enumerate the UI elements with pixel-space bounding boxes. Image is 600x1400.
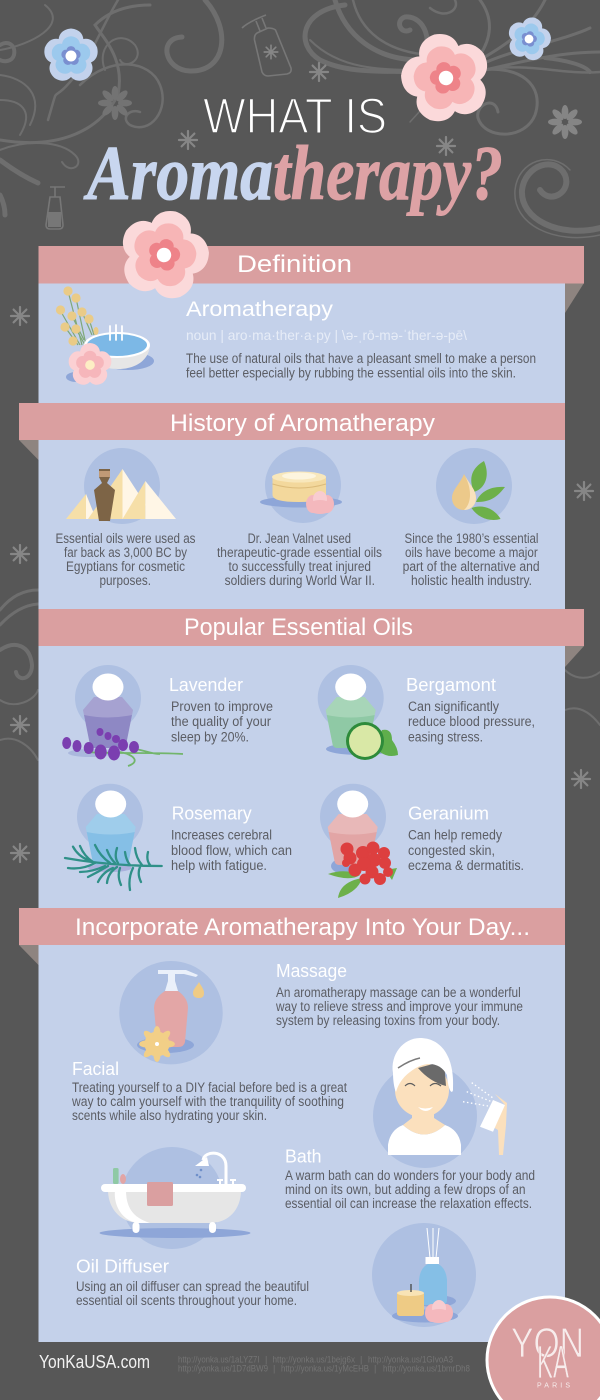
history text: egyptians: Egyptians for cosmetic — [66, 559, 185, 574]
banner: history of aromatherapy — [19, 403, 565, 460]
geranium text: eczema & dermatitis. — [408, 858, 524, 873]
massage text: way to relieve stress and improve your immune — [275, 999, 523, 1014]
icon: bergamot bottle — [318, 665, 398, 760]
footer source links: http://yonka.us/1GIvoA3 — [368, 1355, 453, 1365]
footer source links: | — [374, 1364, 376, 1374]
banner: popular essential oils — [38, 609, 584, 667]
definition text: feel better especially by rubbing the essential oils into the skin. — [186, 366, 516, 380]
logo: yon-ka paris: PARIS — [537, 1382, 570, 1390]
history text: dr valnet — [217, 531, 382, 588]
history text: 1980s — [403, 531, 540, 588]
title: aromatherapy — [84, 130, 503, 216]
footer source links: http://yonka.us/1D7dBW9 — [178, 1364, 268, 1374]
oil diffuser text — [76, 1257, 309, 1308]
history text: egyptians: far back as 3,000 BC by — [64, 545, 187, 560]
icon: bathtub — [100, 1147, 250, 1249]
title: aromatherapy: Aroma — [84, 130, 273, 216]
logo: yon-ka paris — [487, 1297, 600, 1400]
bergamot text — [406, 675, 535, 745]
footer source links: | — [273, 1364, 275, 1374]
history text: 1980s: Since the 1980’s essential — [404, 531, 538, 546]
geranium text — [408, 804, 524, 873]
banner: incorporate aromatherapy — [19, 908, 565, 965]
rosemary text: blood flow, which can — [171, 843, 292, 858]
facial text: Treating yourself to a DIY facial before bed is a great — [72, 1080, 347, 1095]
bergamot text: easing stress. — [408, 730, 483, 745]
footer source links: http://yonka.us/1yMcEHB — [281, 1364, 369, 1374]
banner: history of aromatherapy: History of Aromatherapy — [170, 410, 435, 437]
bergamot text: Can significantly — [408, 699, 499, 714]
definition text: The use of natural oils that have a pleasant smell to make a person — [186, 351, 536, 366]
icon: bowl with flowers — [56, 286, 154, 389]
history text: dr valnet: soldiers during World War II. — [225, 573, 375, 588]
history text: 1980s: oils have become a major — [405, 545, 538, 560]
history text: 1980s: holistic health industry. — [411, 573, 532, 588]
lavender text: the quality of your — [171, 714, 271, 729]
massage text — [275, 961, 523, 1028]
icon: pyramids and vase — [66, 448, 176, 524]
icon: oil drop and leaves — [436, 448, 512, 524]
icon: woman with facial mist — [373, 1038, 507, 1168]
footer source links: | — [360, 1355, 362, 1365]
geranium text: congested skin, — [408, 843, 495, 858]
facial text: scents while also hydrating your skin. — [72, 1108, 267, 1123]
flower: blue top left — [41, 28, 101, 86]
icon: rosemary bottle — [65, 784, 162, 890]
footer source links: http://yonka.us/1aLYZ7I — [178, 1355, 260, 1365]
lavender text: Proven to improve — [171, 699, 273, 714]
oil diffuser text: Oil Diffuser — [76, 1257, 169, 1277]
bath text: essential oil can increase the relaxation effects. — [285, 1196, 532, 1211]
history text: egyptians — [56, 531, 196, 588]
decorative small asterisks and daisies — [11, 63, 593, 862]
flower: blue top right — [500, 12, 558, 68]
icon: small bottle outline left — [46, 187, 65, 229]
logo: yon-ka paris: YON — [511, 1319, 584, 1366]
oil diffuser text: Using an oil diffuser can spread the beautiful — [76, 1279, 309, 1294]
massage text: system by releasing toxins from your body. — [276, 1013, 500, 1028]
icon: lavender bottle — [62, 665, 183, 766]
flower: pink on banner — [104, 199, 223, 314]
banner: definition — [38, 246, 584, 313]
oil diffuser text: essential oil scents throughout your home. — [76, 1293, 297, 1308]
rosemary text: help with fatigue. — [171, 858, 267, 873]
history text: dr valnet: to successfully treat injured — [228, 559, 371, 574]
lavender text: Lavender — [169, 675, 243, 695]
logo: yon-ka paris: KA — [537, 1336, 569, 1388]
massage text: Massage — [276, 961, 347, 981]
geranium text: Can help remedy — [408, 828, 502, 842]
massage text: An aromatherapy massage can be a wonderful — [276, 985, 521, 1000]
icon: massage pump bottle — [119, 961, 223, 1064]
facial text — [71, 1059, 347, 1123]
icon: cream jar and lotus — [260, 447, 342, 523]
geranium text: Geranium — [408, 804, 489, 824]
footer source links: http://yonka.us/1bejg6x — [272, 1355, 355, 1365]
bath text: Bath — [285, 1147, 322, 1167]
icon: geranium bottle — [320, 784, 397, 898]
history text: egyptians: Essential oils were used as — [56, 531, 196, 546]
title: what is: WHAT IS — [203, 88, 387, 144]
title: aromatherapy: therapy? — [273, 130, 503, 216]
bath text: mind on its own, but adding a few drops of an — [285, 1182, 526, 1197]
history text: 1980s: part of the alternative and — [403, 559, 540, 574]
background flourishes — [0, 0, 600, 760]
footer website: YonKaUSA.com — [39, 1352, 150, 1372]
icon: oil diffuser — [372, 1223, 476, 1327]
banner: definition: Definition — [237, 251, 352, 278]
rosemary text: Rosemary — [172, 804, 252, 824]
main panel — [38, 283, 565, 1342]
bergamot text: reduce blood pressure, — [408, 714, 535, 729]
banner: incorporate aromatherapy: Incorporate Aromatherapy Into Your Day... — [75, 914, 530, 941]
icon: soap bottle outline top — [242, 15, 291, 76]
definition text — [186, 298, 536, 380]
rosemary text: Increases cerebral — [171, 828, 272, 842]
bath text: A warm bath can do wonders for your body and — [285, 1168, 535, 1183]
facial text: Facial — [72, 1059, 119, 1079]
history text: dr valnet: therapeutic-grade essential oils — [217, 545, 382, 560]
facial text: way to calm yourself with the tranquility of soothing — [71, 1094, 344, 1109]
bergamot text: Bergamont — [406, 675, 496, 695]
title — [84, 88, 503, 216]
lavender text — [169, 675, 273, 745]
definition text: noun | aro·ma·ther·a·py | \ə-ˌrō-mə-ˈther-ə-pē\ — [186, 327, 467, 343]
lavender text: sleep by 20%. — [171, 730, 249, 745]
footer source links: | — [265, 1355, 267, 1365]
footer source links — [178, 1355, 470, 1374]
banner: popular essential oils: Popular Essential Oils — [184, 614, 413, 641]
bath text — [285, 1147, 535, 1211]
history text: dr valnet: Dr. Jean Valnet used — [248, 531, 351, 546]
flower: pink top right — [387, 22, 506, 137]
history text: egyptians: purposes. — [100, 573, 151, 588]
rosemary text — [171, 804, 292, 873]
definition text: Aromatherapy — [186, 298, 334, 321]
footer source links: http://yonka.us/1bmrDh8 — [383, 1364, 470, 1374]
